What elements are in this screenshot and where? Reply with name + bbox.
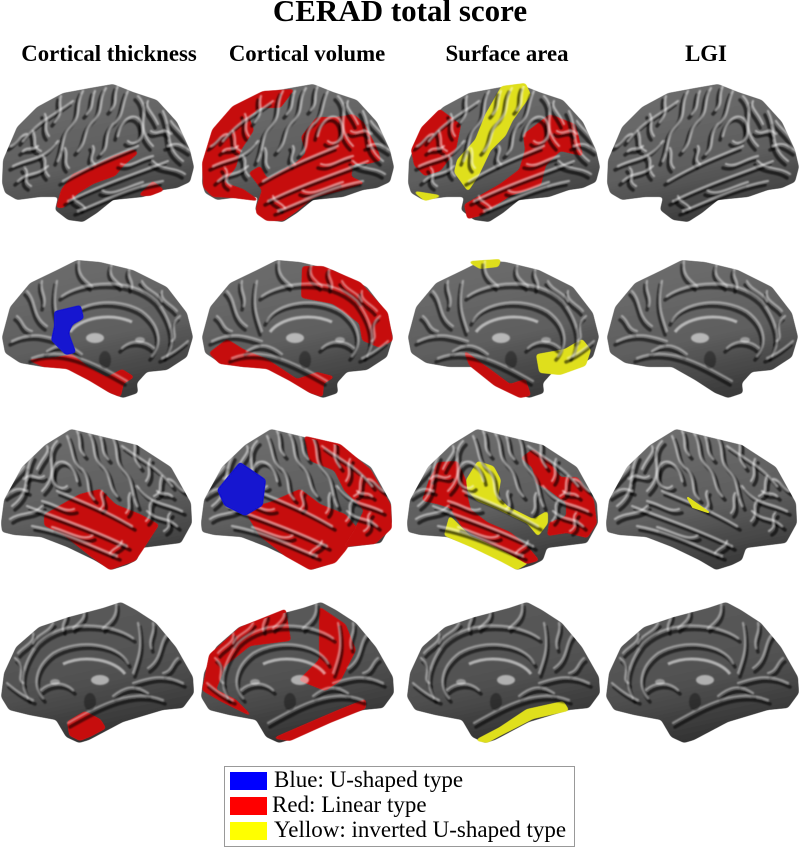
brain: surface area, right medial <box>407 602 600 743</box>
column heading: cortical thickness: Cortical thickness <box>21 41 197 66</box>
brain: cortical thickness, right medial <box>1 602 194 743</box>
brain: LGI, right medial <box>606 602 799 743</box>
brain: cortical volume, medial <box>202 260 393 398</box>
legend item: red: Red: Linear type <box>272 792 427 817</box>
brain: cortical thickness, left lateral <box>2 84 194 222</box>
brain: cortical volume, right lateral <box>201 429 392 570</box>
legend item: blue: Blue: U-shaped type <box>274 767 463 792</box>
brain: surface area, left lateral <box>408 84 600 222</box>
column heading: surface area: Surface area <box>445 41 569 66</box>
brain: cortical volume, left lateral <box>202 84 394 222</box>
brain: cortical volume, right medial <box>201 602 394 743</box>
column heading: LGI: LGI <box>685 41 727 66</box>
brain: surface area, right lateral <box>407 429 598 570</box>
legend item: yellow: Yellow: inverted U-shaped type <box>274 817 566 842</box>
brain: cortical thickness, medial <box>2 260 193 398</box>
brain: LGI, right lateral <box>606 429 797 570</box>
brain: surface area, medial <box>408 260 599 398</box>
legend <box>224 766 574 846</box>
column heading: cortical volume: Cortical volume <box>229 41 385 66</box>
brain: LGI, medial <box>607 260 798 398</box>
brain: cortical thickness, right lateral <box>1 429 192 570</box>
brain: LGI, left lateral <box>607 84 799 222</box>
